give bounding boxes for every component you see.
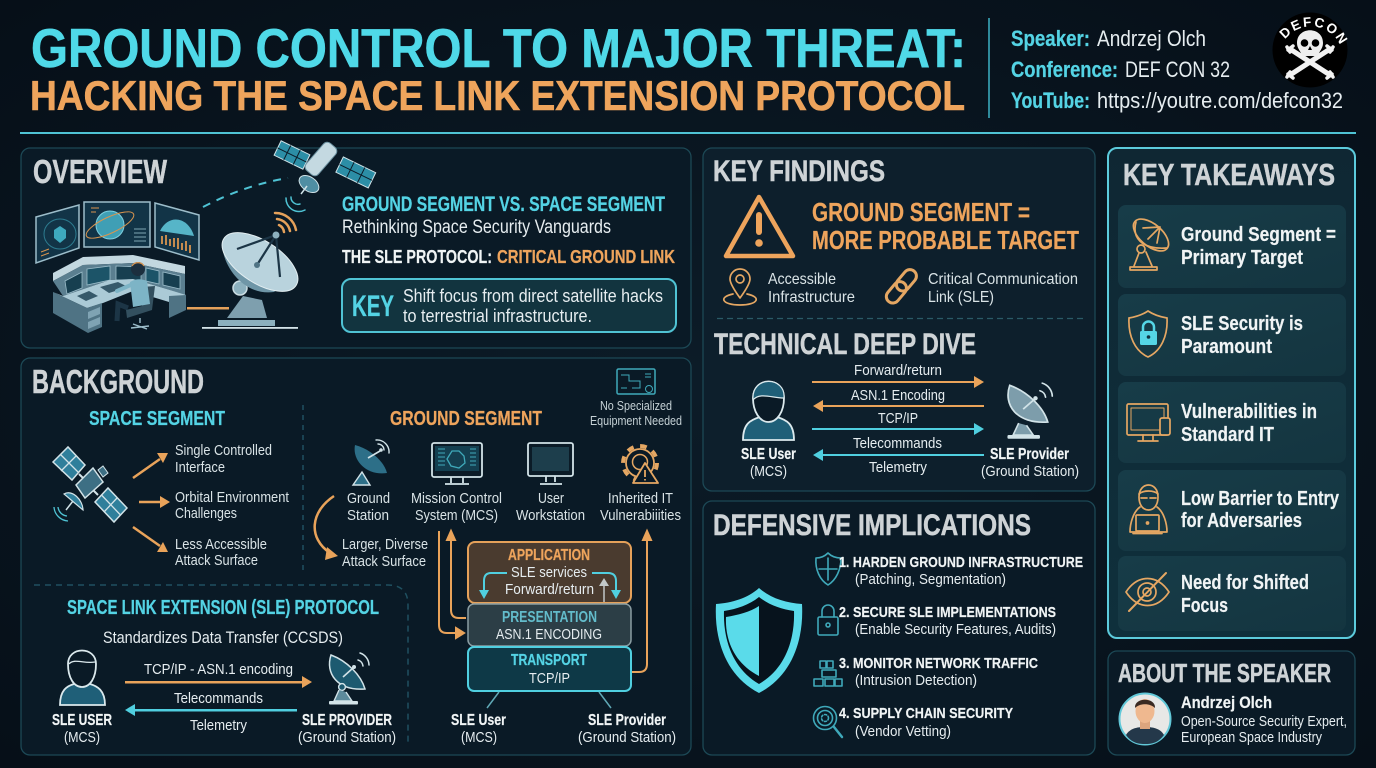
control console [53, 255, 186, 333]
heading: overview: OVERVIEW [33, 153, 168, 190]
label: SLE provider [578, 712, 676, 746]
icon: DEF CON skull logo [1272, 12, 1348, 88]
sub-panel: ground segment [315, 369, 682, 746]
text [1181, 224, 1336, 269]
ground segment labels: System (MCS) [415, 507, 498, 524]
heading: space segment: SPACE SEGMENT [89, 407, 225, 430]
text: item 3: 3. MONITOR NETWORK TRAFFIC [839, 655, 1038, 672]
text [1181, 313, 1303, 358]
item: monitor network traffic [814, 655, 1038, 689]
text [1181, 401, 1317, 446]
title [30, 18, 966, 119]
icon: SLE provider [329, 653, 369, 704]
label: SLE provider [981, 446, 1079, 480]
card: shifted focus [1118, 556, 1346, 631]
text: Need for Shifted [1181, 572, 1309, 594]
protocol stack: application [468, 542, 631, 603]
text: item 2: (Enable Security Features, Audits) [855, 622, 1056, 638]
card: ground segment [1118, 205, 1346, 288]
text: item 1: (Patching, Segmentation) [855, 572, 1006, 588]
speaker details: Speaker: [1011, 26, 1090, 51]
ground segment labels: Ground [347, 490, 390, 507]
label: SLE user: SLE User [451, 712, 506, 729]
note: no specialized equipment: No Specialized [600, 399, 672, 413]
text: standardizes: Standardizes Data Transfer (CCSDS) [103, 628, 343, 647]
text: Low Barrier to Entry [1181, 488, 1340, 510]
arrow: single controlled interface [133, 453, 168, 478]
arrow: up from transport [632, 531, 651, 672]
arrow: telecommands and telemetry: Telecommands [853, 435, 942, 452]
space segment points: Challenges [175, 505, 237, 522]
panel: background [21, 358, 691, 755]
callout: ground segment target [812, 197, 1079, 255]
text: item 2 [839, 604, 1056, 638]
signal arcs [275, 213, 296, 232]
label: SLE provider: SLE Provider [588, 712, 666, 729]
icon: chain link [884, 267, 919, 306]
arrow: less accessible [133, 527, 168, 552]
text: item 3: (Intrusion Detection) [855, 673, 977, 689]
arrow: ASN.1 encoding: ASN.1 Encoding [851, 387, 945, 404]
text: item 1 [839, 554, 1083, 588]
text: SLE protocol [342, 246, 676, 267]
icon: user workstation [528, 443, 573, 484]
label: SLE provider [298, 712, 396, 746]
callout: key [342, 279, 676, 332]
note: no specialized equipment [590, 399, 682, 428]
header [30, 12, 1348, 119]
heading: background: BACKGROUND [32, 363, 204, 400]
speaker details: Andrzej Olch [1097, 26, 1206, 51]
callout: key: to terrestrial infrastructure. [403, 306, 592, 326]
label: SLE provider: (Ground Station) [578, 729, 676, 746]
icon: SLE user [743, 381, 794, 440]
arrow: TCP/IP: TCP/IP [878, 410, 918, 427]
protocol stack: transport [468, 647, 631, 691]
text: item 1: 1. HARDEN GROUND INFRASTRUCTURE [839, 554, 1083, 571]
speaker bio: Andrzej Olch [1181, 693, 1272, 712]
protocol stack: transport: TRANSPORT [511, 652, 587, 669]
arrow: down into presentation [439, 531, 464, 638]
text: SLE Security is [1181, 313, 1303, 335]
protocol stack: application: SLE services [511, 564, 587, 581]
text: ground vs space [342, 193, 665, 238]
heading: technical deep dive: TECHNICAL DEEP DIVE [714, 328, 976, 361]
avatar: speaker portrait [1120, 694, 1170, 744]
callout: key: KEY [352, 290, 394, 323]
arrow: telemetry return: Telecommands [174, 690, 263, 707]
speaker bio: European Space Industry [1181, 730, 1323, 746]
right monitor [155, 203, 199, 260]
text: ground vs space: GROUND SEGMENT VS. SPACE SEGMENT [342, 193, 665, 216]
item: secure SLE implementations [818, 604, 1056, 638]
sub-panel: SLE protocol [34, 585, 408, 746]
arrow: TCP/IP [812, 410, 984, 435]
label: SLE user: SLE USER [52, 712, 112, 729]
title: GROUND CONTROL TO MAJOR THREAT: [31, 18, 966, 79]
protocol stack: application: Forward/return [505, 581, 594, 598]
label: SLE provider: (Ground Station) [981, 463, 1079, 480]
protocol stack: presentation [468, 604, 631, 646]
text: Primary Target [1181, 247, 1303, 269]
card: low barrier [1118, 470, 1346, 551]
text: Standard IT [1181, 424, 1274, 446]
illustration: control room, dish and satellite [36, 140, 376, 333]
arrow: forward/return [812, 362, 984, 388]
note: no specialized equipment: Equipment Needed [590, 414, 682, 428]
arrow: telemetry return: Telemetry [190, 717, 247, 734]
ground segment labels: User [538, 490, 564, 507]
space segment points: Single Controlled [175, 442, 272, 459]
text: for Adversaries [1181, 510, 1302, 532]
card: vulnerabilities in IT [1118, 382, 1346, 463]
label: SLE user: (MCS) [64, 729, 100, 746]
speaker details: DEF CON 32 [1125, 57, 1230, 82]
text: ground vs space: Rethinking Space Security Vanguards [342, 217, 611, 238]
card: SLE security [1118, 294, 1346, 376]
icon: shield with lock [1129, 311, 1167, 357]
icon: network [814, 661, 842, 686]
text: item 4 [839, 705, 1013, 740]
icon: inherited vulnerabilities gear [623, 446, 658, 483]
text: attack surface: Larger, Diverse [342, 536, 428, 553]
left monitor [36, 205, 79, 263]
dashed uplink [203, 178, 288, 207]
heading: SLE protocol: SPACE LINK EXTENSION (SLE) PROTOCOL [67, 597, 379, 619]
icon: shield [816, 553, 841, 585]
speaker details: Conference: [1011, 57, 1118, 82]
protocol stack: application: APPLICATION [508, 547, 590, 564]
label: SLE user [451, 712, 506, 746]
label: SLE provider: SLE Provider [990, 446, 1069, 463]
icon: SLE provider [1007, 383, 1052, 439]
text: attack surface [342, 536, 428, 570]
icon: satellite [53, 447, 127, 522]
ground segment labels: Workstation [516, 507, 585, 524]
icon: satellite [274, 140, 376, 196]
ground segment labels: Inherited IT [608, 490, 673, 507]
heading: ground segment: GROUND SEGMENT [390, 407, 542, 430]
space segment points [175, 442, 290, 569]
label: SLE user [741, 446, 796, 480]
label: SLE provider: (Ground Station) [298, 729, 396, 746]
panel: key findings [703, 148, 1095, 491]
label: SLE user: (MCS) [750, 463, 787, 480]
text: accessible infrastructure: Infrastructure [768, 289, 855, 306]
arrow: forward/return: Forward/return [854, 362, 942, 379]
text [1181, 572, 1309, 617]
icon: padlock [818, 605, 838, 635]
icon: ground station [353, 440, 389, 485]
text [1181, 488, 1340, 532]
ground segment labels: Station [347, 507, 389, 524]
icon: magnifier [814, 706, 842, 737]
item: supply chain security [814, 705, 1013, 740]
text: Ground Segment = [1181, 224, 1336, 246]
ground segment labels: Vulnerabiiities [600, 507, 681, 524]
arrow: up from presentation [447, 531, 466, 618]
label: SLE user: (MCS) [461, 729, 497, 746]
label: SLE user: SLE User [741, 446, 796, 463]
text: Vulnerabilities in [1181, 401, 1317, 423]
speaker bio [1181, 693, 1347, 746]
label: SLE user [52, 712, 112, 746]
text: SLE protocol: THE SLE PROTOCOL: [342, 246, 492, 267]
text: item 4: (Vendor Vetting) [855, 724, 951, 740]
ground segment labels: Mission Control [411, 490, 502, 507]
icon: large shield [716, 588, 802, 693]
title: HACKING THE SPACE LINK EXTENSION PROTOCOL [30, 72, 965, 119]
icon: mission control monitor [432, 443, 482, 484]
text: attack surface: Attack Surface [342, 553, 426, 570]
icon: dish [1128, 213, 1174, 270]
panel: about the speaker [1108, 651, 1355, 755]
panel: defensive implications [703, 501, 1095, 755]
operator at console [117, 262, 155, 329]
label: SLE provider: SLE PROVIDER [302, 712, 392, 729]
icon: location pin [724, 269, 756, 305]
space segment points: Interface [175, 459, 225, 476]
speaker details: https://youtre.com/defcon32 [1097, 88, 1343, 113]
arrow: TCP/IP forward [125, 661, 312, 688]
text: critical link: Link (SLE) [928, 289, 994, 306]
arrow: telecommands and telemetry: Telemetry [869, 459, 927, 476]
arrow: telemetry return [125, 690, 297, 734]
text: item 2: 2. SECURE SLE IMPLEMENTATIONS [839, 604, 1056, 621]
callout: ground segment target: GROUND SEGMENT = [812, 197, 1030, 227]
arrow: telecommands and telemetry [813, 435, 984, 476]
heading: key findings: KEY FINDINGS [713, 155, 885, 188]
text: item 3 [839, 655, 1038, 689]
item: harden ground infrastructure [816, 553, 1083, 588]
speaker details: YouTube: [1011, 88, 1090, 113]
text: Paramount [1181, 336, 1272, 358]
cable [187, 307, 229, 310]
icon: hacker with laptop [1130, 485, 1167, 534]
arrow: orbital environment [139, 496, 170, 508]
arrow: TCP/IP forward: TCP/IP - ASN.1 encoding [144, 661, 293, 678]
callout: ground segment target: MORE PROBABLE TARGET [812, 225, 1079, 255]
arrow: curved to attack surface [315, 496, 338, 560]
space segment points: Attack Surface [175, 552, 258, 569]
icon: SLE user [60, 650, 105, 705]
text: item 4: 4. SUPPLY CHAIN SECURITY [839, 705, 1013, 722]
icon: no specialized equipment [617, 369, 655, 394]
speaker bio: Open-Source Security Expert, [1181, 714, 1347, 730]
icon: DEF CON skull logo: DEFCON [1279, 17, 1348, 44]
text: SLE protocol: CRITICAL GROUND LINK [497, 246, 676, 267]
text: accessible infrastructure: Accessible [768, 271, 836, 288]
icon: large dish [202, 213, 308, 329]
sub-panel: space segment [53, 407, 290, 569]
protocol stack: presentation: PRESENTATION [502, 609, 597, 626]
text: accessible infrastructure [768, 271, 855, 306]
text: Focus [1181, 595, 1228, 617]
icon: monitor and phone [1127, 404, 1170, 441]
speaker details [1011, 26, 1343, 113]
centre monitor [83, 202, 150, 247]
icon: warning triangle [726, 197, 793, 256]
protocol stack: transport: TCP/IP [529, 670, 570, 687]
panel: overview [21, 140, 691, 348]
text: critical link: Critical Communication [928, 271, 1078, 288]
arrow: ASN.1 encoding [813, 387, 984, 412]
panel: key takeaways [1108, 148, 1355, 638]
protocol stack: presentation: ASN.1 ENCODING [496, 626, 602, 643]
icon: crossed eye [1126, 573, 1169, 611]
space segment points: Less Accessible [175, 536, 267, 553]
ground segment labels [347, 490, 681, 524]
callout: key: Shift focus from direct satellite hacks [403, 286, 663, 306]
space segment points: Orbital Environment [175, 489, 290, 506]
heading: defensive implications: DEFENSIVE IMPLICATIONS [713, 509, 1031, 542]
text: critical link [928, 271, 1078, 306]
